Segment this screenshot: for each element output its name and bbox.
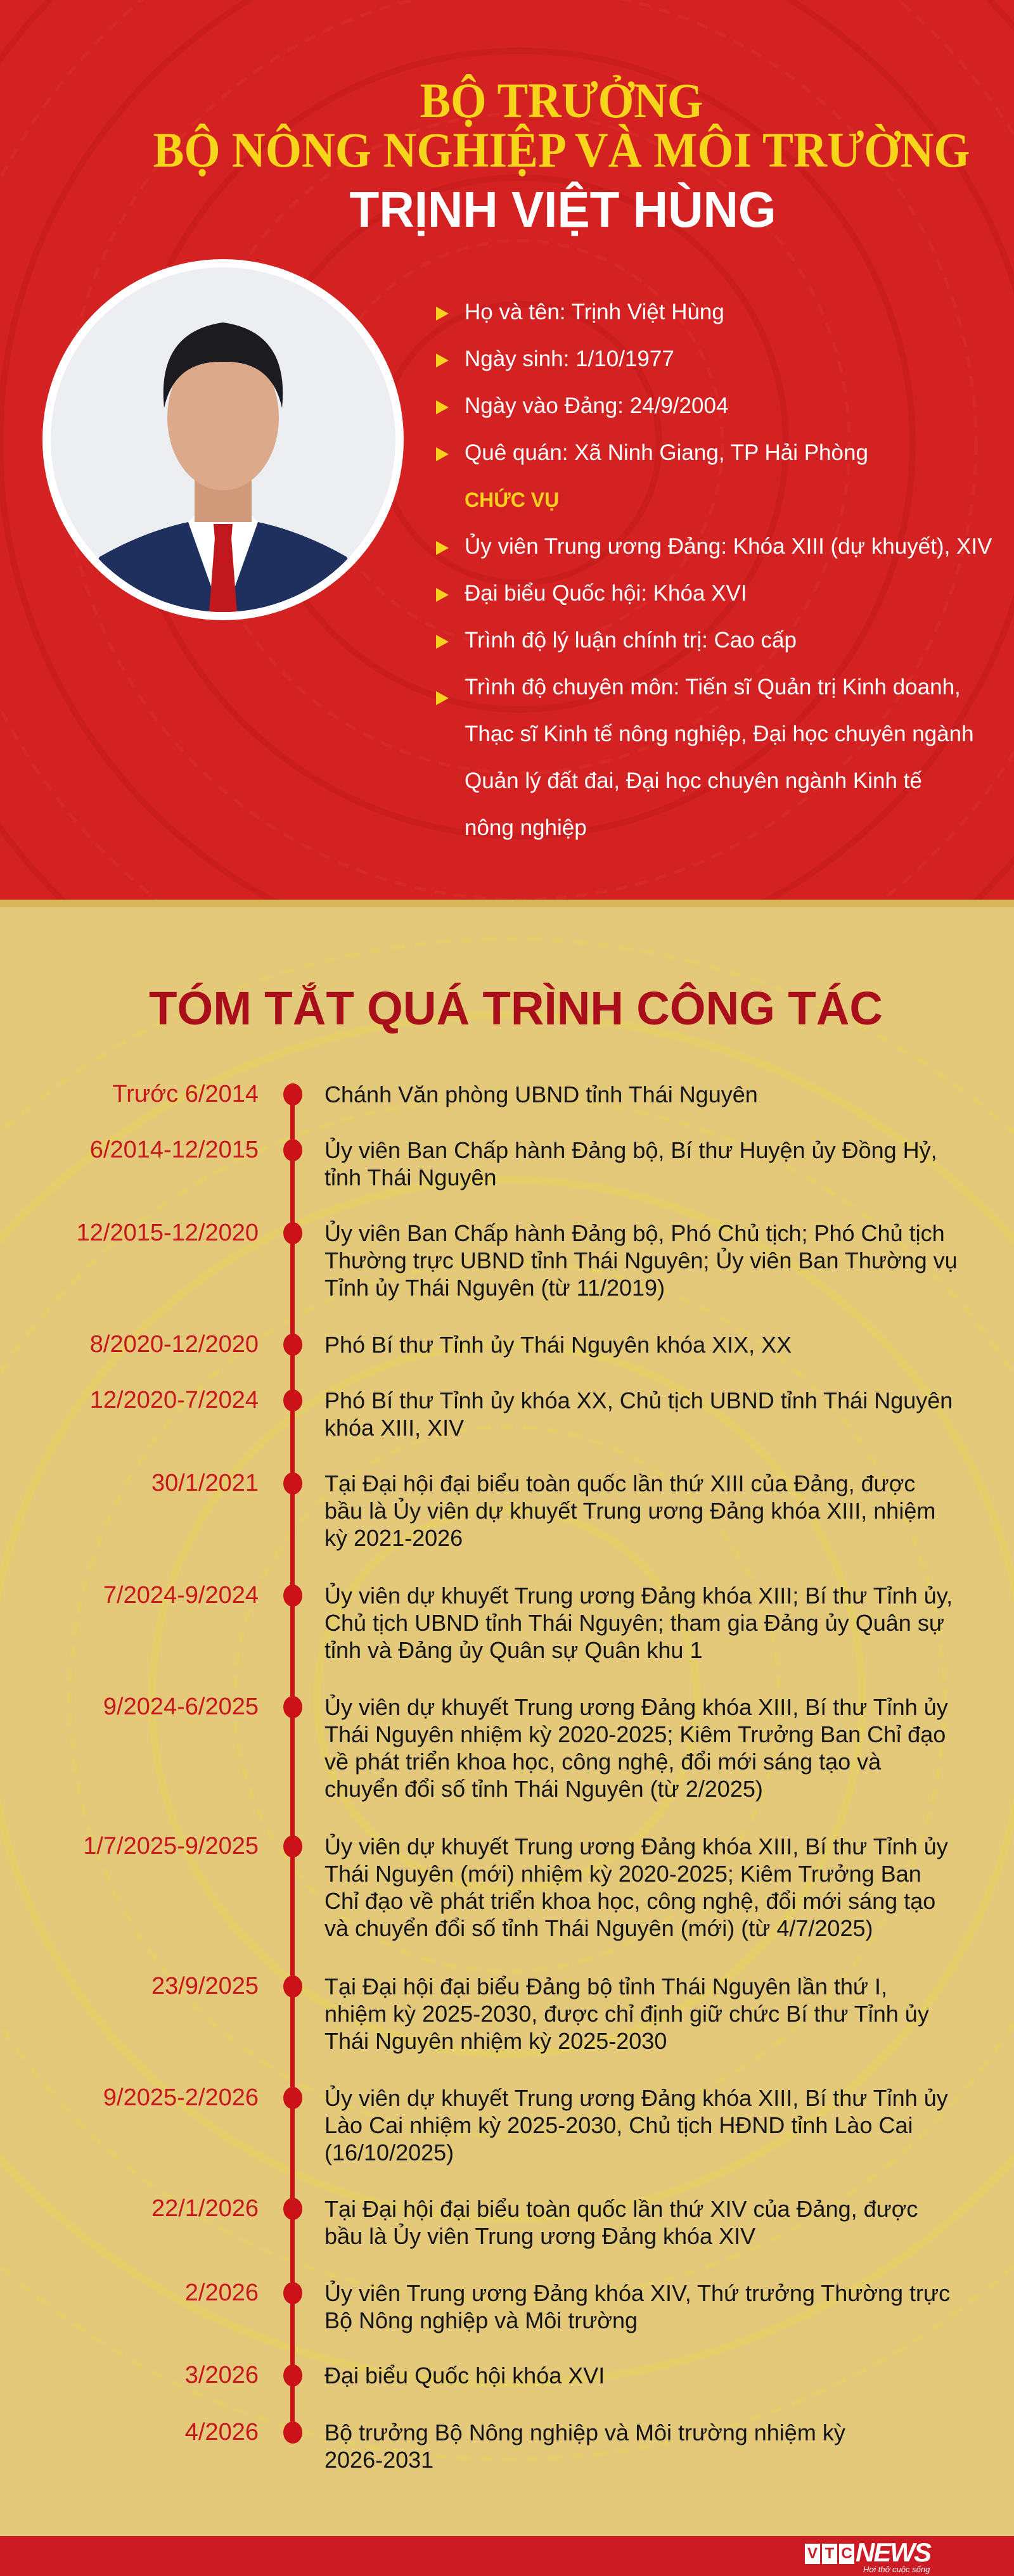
timeline: tỉnh và Đảng ủy Quân sự Quân khu 1 — [324, 1637, 702, 1663]
timeline: Ủy viên dự khuyết Trung ương Đảng khóa XIII, Bí thư Tỉnh ủy — [324, 2085, 948, 2111]
timeline: Ủy viên Trung ương Đảng khóa XIV, Thứ trưởng Thường trực — [324, 2280, 950, 2306]
item: 2/2026 — [185, 2280, 950, 2333]
item: truoc 6/2014 — [112, 1081, 758, 1107]
item: 6/2014-12/2015 — [90, 1137, 937, 1190]
title: BỘ TRƯỞNG — [420, 73, 703, 128]
timeline: 9/2025-2/2026 — [103, 2084, 259, 2111]
footer bar — [0, 2536, 1014, 2576]
timeline: nhiệm kỳ 2025-2030, được chỉ định giữ chức Bí thư Tỉnh ủy — [324, 2001, 929, 2027]
info list: Quản lý đất đai, Đại học chuyên ngành Kinh tế — [465, 768, 922, 793]
timeline: Phó Bí thư Tỉnh ủy khóa XX, Chủ tịch UBND tỉnh Thái Nguyên — [324, 1387, 953, 1413]
timeline: Tại Đại hội đại biểu toàn quốc lần thứ XIII của Đảng, được — [324, 1470, 915, 1496]
item: 1/7/2025-9/2025 — [83, 1833, 948, 1941]
timeline: 1/7/2025-9/2025 — [83, 1833, 259, 1859]
timeline: 30/1/2021 — [151, 1470, 259, 1496]
info list: Đại biểu Quốc hội: Khóa XVI — [465, 581, 747, 606]
info list: Thạc sĩ Kinh tế nông nghiệp, Đại học chuyên ngành — [465, 722, 974, 746]
timeline: Tỉnh ủy Thái Nguyên (từ 11/2019) — [324, 1275, 665, 1301]
bullet: education — [436, 675, 974, 840]
timeline: 12/2020-7/2024 — [90, 1387, 259, 1413]
timeline: Lào Cai nhiệm kỳ 2025-2030, Chủ tịch HĐND tỉnh Lào Cai — [324, 2112, 913, 2138]
info list: Trình độ chuyên môn: Tiến sĩ Quản trị Kinh doanh, — [465, 675, 961, 699]
item: 23/9/2025 — [151, 1973, 929, 2054]
title: BỘ NÔNG NGHIỆP VÀ MÔI TRƯỜNG — [153, 122, 970, 177]
timeline: chuyển đổi số tỉnh Thái Nguyên (từ 2/2025) — [324, 1776, 763, 1802]
timeline: 4/2026 — [185, 2419, 259, 2445]
timeline: Ủy viên Ban Chấp hành Đảng bộ, Bí thư Huyện ủy Đồng Hỷ, — [324, 1137, 937, 1163]
timeline: về phát triển khoa học, công nghệ, đổi mới sáng tạo và — [324, 1749, 881, 1775]
item: 12/2015-12/2020 — [77, 1220, 958, 1301]
timeline: Ủy viên Ban Chấp hành Đảng bộ, Phó Chủ tịch; Phó Chủ tịch — [324, 1220, 945, 1246]
timeline: bầu là Ủy viên dự khuyết Trung ương Đảng khóa XIII, nhiệm — [324, 1498, 935, 1524]
heading: chuc vu: CHỨC VỤ — [465, 488, 559, 511]
title: TRỊNH VIỆT HÙNG — [350, 181, 776, 238]
item: 30/1/2021 — [151, 1470, 935, 1551]
logo: VTC News: Hơi thở cuộc sống — [863, 2565, 930, 2574]
timeline: Trước 6/2014 — [112, 1081, 259, 1107]
timeline: 23/9/2025 — [151, 1973, 259, 1999]
item: 9/2024-6/2025 — [103, 1693, 948, 1802]
bullet: name — [436, 300, 724, 324]
bullet: national assembly — [436, 581, 747, 606]
timeline: kỳ 2021-2026 — [324, 1525, 463, 1551]
timeline: Chủ tịch UBND tỉnh Thái Nguyên; tham gia Đảng ủy Quân sự — [324, 1610, 944, 1636]
timeline: Thái Nguyên (mới) nhiệm kỳ 2020-2025; Kiêm Trưởng Ban — [324, 1861, 921, 1887]
timeline: khóa XIII, XIV — [324, 1415, 464, 1441]
item: 4/2026 — [185, 2419, 845, 2473]
timeline: 7/2024-9/2024 — [103, 1582, 259, 1609]
info list: Trình độ lý luận chính trị: Cao cấp — [465, 628, 797, 653]
timeline: Phó Bí thư Tỉnh ủy Thái Nguyên khóa XIX, XX — [324, 1332, 792, 1358]
timeline: Thái Nguyên nhiệm kỳ 2020-2025; Kiêm Trưởng Ban Chỉ đạo — [324, 1721, 946, 1747]
timeline: Chỉ đạo về phát triển khoa học, công nghệ, đổi mới sáng tạo — [324, 1888, 935, 1914]
logo: VTC News: V — [807, 2545, 818, 2562]
logo: VTC News: NEWS — [856, 2537, 930, 2567]
info list: nông nghiệp — [465, 815, 587, 840]
info list: Họ và tên: Trịnh Việt Hùng — [465, 300, 724, 324]
item: 7/2024-9/2024 — [103, 1582, 953, 1663]
item: 3/2026 — [185, 2362, 605, 2388]
timeline: Ủy viên dự khuyết Trung ương Đảng khóa XIII, Bí thư Tỉnh ủy — [324, 1833, 948, 1859]
background pattern: gold section — [0, 937, 1014, 2461]
info list: Ngày sinh: 1/10/1977 — [465, 347, 674, 371]
info list: Ủy viên Trung ương Đảng: Khóa XIII (dự khuyết), XIV — [465, 534, 992, 559]
timeline vertical line — [290, 1095, 295, 2433]
logo: VTC News: C — [841, 2545, 852, 2562]
title — [153, 73, 970, 238]
item: 22/1/2026 — [151, 2195, 918, 2249]
timeline: 2/2026 — [185, 2280, 259, 2306]
info list: Quê quán: Xã Ninh Giang, TP Hải Phòng — [465, 440, 868, 465]
logo: VTC News: T — [825, 2545, 834, 2562]
timeline: bầu là Ủy viên Trung ương Đảng khóa XIV — [324, 2223, 755, 2249]
timeline: Ủy viên dự khuyết Trung ương Đảng khóa XIII; Bí thư Tỉnh ủy, — [324, 1583, 953, 1609]
section heading: TÓM TẮT QUÁ TRÌNH CÔNG TÁC — [149, 982, 883, 1035]
timeline: 12/2015-12/2020 — [77, 1220, 259, 1246]
bullet: central committee — [436, 533, 992, 559]
timeline: 3/2026 — [185, 2362, 259, 2388]
bullet: birth — [436, 347, 674, 371]
timeline: 6/2014-12/2015 — [90, 1137, 259, 1163]
portrait photo — [42, 259, 404, 620]
timeline — [77, 1081, 958, 2473]
timeline: Ủy viên dự khuyết Trung ương Đảng khóa XIII, Bí thư Tỉnh ủy — [324, 1694, 948, 1720]
info list — [436, 300, 992, 840]
timeline: Tại Đại hội đại biểu toàn quốc lần thứ XIV của Đảng, được — [324, 2196, 918, 2222]
bullet: hometown — [436, 440, 868, 465]
timeline: Đại biểu Quốc hội khóa XVI — [324, 2362, 605, 2388]
background: red header — [0, 0, 1014, 901]
timeline: Bộ trưởng Bộ Nông nghiệp và Môi trường nhiệm kỳ — [324, 2420, 845, 2445]
gold strip — [0, 900, 1014, 907]
item: 9/2025-2/2026 — [103, 2084, 948, 2165]
timeline: Tại Đại hội đại biểu Đảng bộ tỉnh Thái Nguyên lần thứ I, — [324, 1973, 887, 1999]
timeline: (16/10/2025) — [324, 2139, 454, 2165]
bullet: political level — [436, 628, 797, 653]
timeline: tỉnh Thái Nguyên — [324, 1164, 497, 1190]
timeline: 8/2020-12/2020 — [90, 1331, 259, 1358]
info list: Ngày vào Đảng: 24/9/2004 — [465, 393, 728, 418]
logo: VTC News — [805, 2537, 932, 2574]
bullet: party — [436, 393, 728, 418]
timeline: 22/1/2026 — [151, 2195, 259, 2222]
item: 12/2020-7/2024 — [90, 1387, 953, 1441]
timeline: và chuyển đổi số tỉnh Thái Nguyên (mới) (từ 4/7/2025) — [324, 1915, 873, 1941]
timeline: 9/2024-6/2025 — [103, 1693, 259, 1720]
timeline: Thường trực UBND tỉnh Thái Nguyên; Ủy viên Ban Thường vụ — [324, 1247, 958, 1273]
timeline: Thái Nguyên nhiệm kỳ 2025-2030 — [324, 2028, 667, 2054]
timeline: 2026-2031 — [324, 2447, 433, 2473]
timeline: Bộ Nông nghiệp và Môi trường — [324, 2307, 638, 2333]
item: 8/2020-12/2020 — [90, 1331, 792, 1358]
timeline: Chánh Văn phòng UBND tỉnh Thái Nguyên — [324, 1081, 758, 1107]
